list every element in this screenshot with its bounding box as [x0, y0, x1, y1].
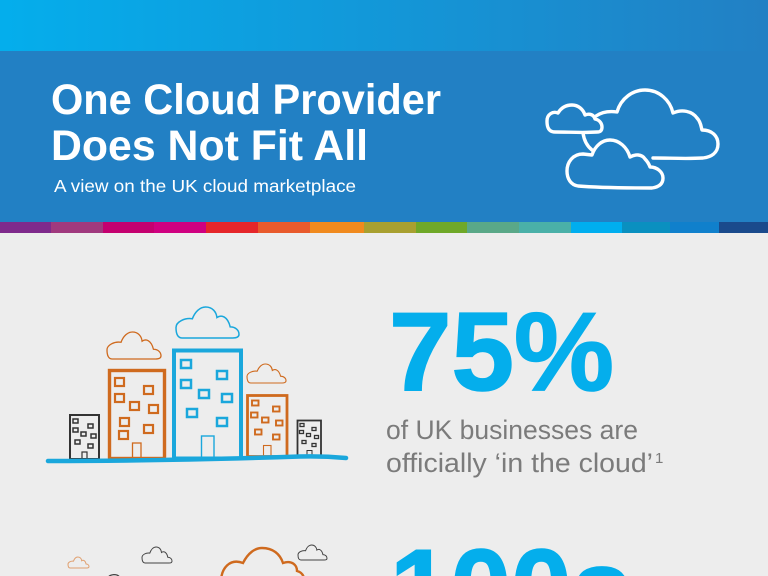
statistic description: of UK businesses are [386, 415, 638, 445]
statistic description [386, 415, 663, 478]
cloud: blue [176, 307, 239, 338]
building: orange right [248, 396, 287, 456]
cloud: orange right [247, 364, 286, 383]
cloud: black left [142, 547, 172, 563]
illustration: small clouds, second section [68, 545, 327, 576]
statistic description: 1 [655, 450, 663, 467]
title [51, 76, 441, 170]
title: One Cloud Provider [51, 76, 441, 124]
cloud: black right [298, 545, 327, 560]
cloud: partly visible black [108, 575, 120, 576]
statistic: 75%: 75% [389, 290, 614, 414]
building: orange left [110, 370, 164, 459]
subtitle: A view on the UK cloud marketplace [54, 176, 356, 196]
cloud: orange left [107, 332, 161, 359]
building: black right [298, 420, 321, 456]
statistic description: officially ‘in the cloud’ [386, 448, 653, 478]
title: Does Not Fit All [51, 122, 368, 170]
top gradient band [0, 0, 768, 51]
panel: header [0, 51, 768, 222]
building: black left [70, 415, 99, 459]
cloud: pale orange [68, 557, 89, 568]
ground line [48, 456, 346, 461]
colour stripe [0, 222, 768, 233]
statistic: 75% [386, 290, 663, 478]
building: blue centre [174, 350, 241, 458]
icon: three clouds [547, 90, 718, 188]
cloud: large orange [221, 548, 304, 576]
illustration: city skyline [48, 307, 346, 461]
